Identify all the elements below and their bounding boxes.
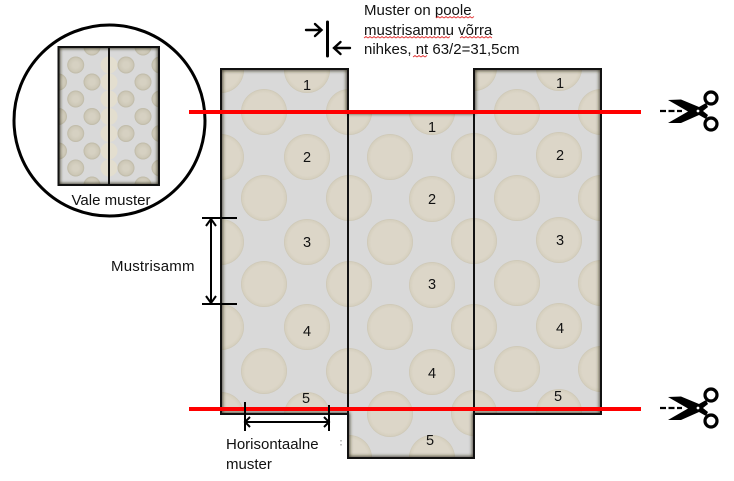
- strip numbers: right: 2: [556, 148, 564, 164]
- strip numbers: right: 5: [554, 389, 562, 405]
- stray marks: [340, 440, 342, 446]
- strip numbers: middle: 4: [428, 366, 436, 382]
- strip numbers: middle: [426, 120, 436, 449]
- dimension: horizontal pattern: [245, 402, 329, 431]
- strip numbers: left: [302, 78, 311, 407]
- note: pattern offset: [364, 2, 520, 58]
- strip numbers: middle: 5: [426, 433, 434, 449]
- strip numbers: middle: 1: [428, 120, 436, 136]
- note: pattern offset: Muster on poole: [364, 2, 472, 19]
- label: pattern repeat: Mustrisamm: [111, 258, 195, 275]
- strip numbers: right: 4: [556, 321, 564, 337]
- strip numbers: left: 3: [303, 235, 311, 251]
- inset pattern strips: [58, 46, 160, 186]
- strip numbers: right: [554, 76, 564, 405]
- offset marker arrows: [306, 22, 350, 56]
- strip numbers: middle: 3: [428, 277, 436, 293]
- note: pattern offset: mustrisammu võrra: [364, 22, 493, 39]
- strip numbers: right: 3: [556, 233, 564, 249]
- icon: scissors bottom: [660, 389, 717, 427]
- strip numbers: left: 1: [303, 78, 311, 94]
- inset circle outline: [14, 25, 205, 216]
- inset caption: Vale muster: [72, 192, 150, 209]
- strip numbers: left: 5: [302, 391, 310, 407]
- strip numbers: left: 4: [303, 324, 311, 340]
- label: horizontal pattern: muster: [226, 456, 272, 473]
- label: horizontal pattern: [226, 436, 319, 473]
- cut line: bottom: [189, 407, 641, 411]
- strip numbers: left: 2: [303, 150, 311, 166]
- note: pattern offset: nihkes, nt 63/2=31,5cm: [364, 41, 520, 58]
- inset: wrong pattern: [14, 25, 205, 216]
- pattern circles: [222, 70, 600, 457]
- inner edge shading: [221, 69, 601, 458]
- label: horizontal pattern: Horisontaalne: [226, 436, 319, 453]
- panels: three wallpaper strips: [220, 68, 602, 459]
- strip numbers: middle: 2: [428, 192, 436, 208]
- icon: scissors top: [660, 92, 717, 130]
- strip outlines: [221, 69, 601, 458]
- dimension: pattern repeat: [202, 218, 237, 304]
- cut line: top: [189, 110, 641, 114]
- strip numbers: right: 1: [556, 76, 564, 92]
